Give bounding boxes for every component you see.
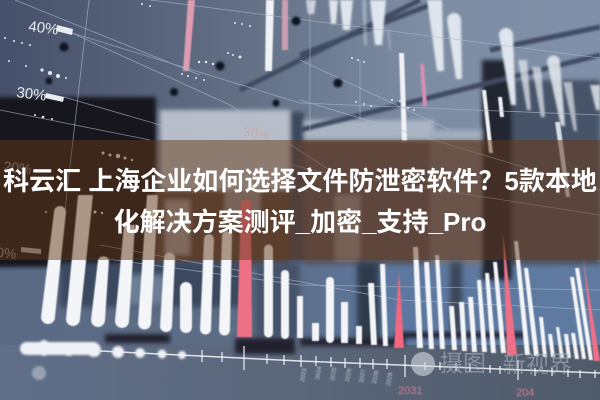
pink years: 204 <box>516 387 534 399</box>
title line 1: 科云汇 上海企业如何选择文件防泄密软件？5款本地 <box>3 166 597 196</box>
watermark: 摄图 <box>440 350 486 376</box>
timeline <box>20 340 600 399</box>
title line 2: 化解决方案测评_加密_支持_Pro <box>114 207 486 237</box>
hanging ceiling bars <box>306 0 600 131</box>
scatter dots <box>4 3 415 214</box>
timeline bubbles <box>20 340 186 380</box>
caption band <box>0 140 600 260</box>
pink years: 2031 <box>398 385 422 397</box>
timeline axis <box>100 351 600 373</box>
watermark: 新视界 <box>503 351 572 377</box>
title <box>3 166 597 237</box>
year labels: 2024 <box>315 366 323 380</box>
year labels: 2023 <box>300 368 308 382</box>
pink bars <box>237 200 600 361</box>
dark desk shapes <box>105 332 525 354</box>
watermark: · <box>501 350 509 376</box>
year labels: 2028 <box>372 370 380 384</box>
year labels: 2026 <box>345 368 353 382</box>
dark blurred dots <box>46 16 342 106</box>
year labels: 2025 <box>330 367 338 381</box>
upper chart columns <box>183 0 570 197</box>
label: 30% pink: 30% <box>243 124 271 142</box>
year labels: 2029 <box>386 372 394 386</box>
year labels <box>300 366 394 386</box>
label: 20%: 20% <box>3 158 32 177</box>
watermark <box>411 350 572 377</box>
pink years <box>398 385 534 399</box>
white bar chart <box>41 195 593 360</box>
ceiling beams <box>240 0 600 130</box>
label: 30%: 30% <box>16 84 47 105</box>
trend lines <box>0 0 600 310</box>
axis labels and ticks <box>0 18 271 262</box>
label: 40%: 40% <box>28 18 59 39</box>
year labels: 2027 <box>359 369 367 383</box>
